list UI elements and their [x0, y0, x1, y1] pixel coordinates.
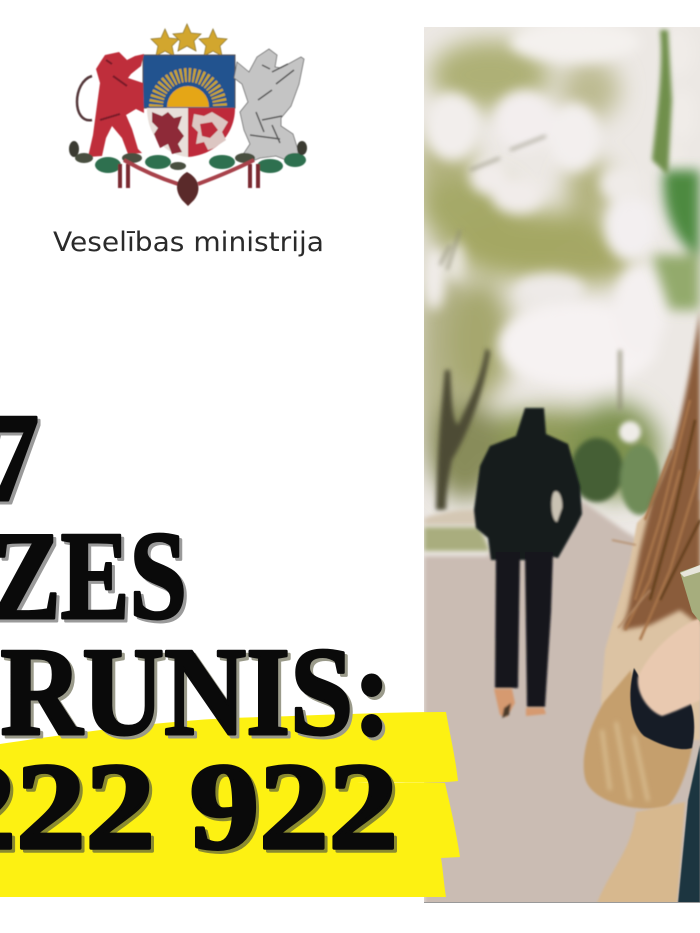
ribbon — [120, 160, 258, 206]
griffin — [234, 49, 304, 162]
coat of arms — [69, 24, 307, 206]
woman: cuff — [630, 668, 694, 749]
road — [424, 502, 700, 910]
woman: hair — [622, 310, 700, 630]
photo bottom edge — [424, 902, 700, 903]
woman: coat shoulder — [601, 500, 700, 740]
woman: coat sleeve — [584, 670, 692, 809]
yellow highlight strokes — [0, 712, 460, 897]
shield — [143, 55, 235, 157]
woman: dark top — [678, 745, 700, 903]
lion — [77, 52, 144, 157]
phone — [680, 565, 700, 622]
man walking away — [474, 408, 582, 718]
woman: hand — [638, 618, 700, 716]
woman: coat lower — [597, 802, 685, 903]
photo: woman with phone in park — [415, 22, 700, 910]
stars — [151, 24, 227, 56]
oak garland — [69, 141, 307, 173]
ministry name: Veselības ministrija — [53, 227, 324, 258]
